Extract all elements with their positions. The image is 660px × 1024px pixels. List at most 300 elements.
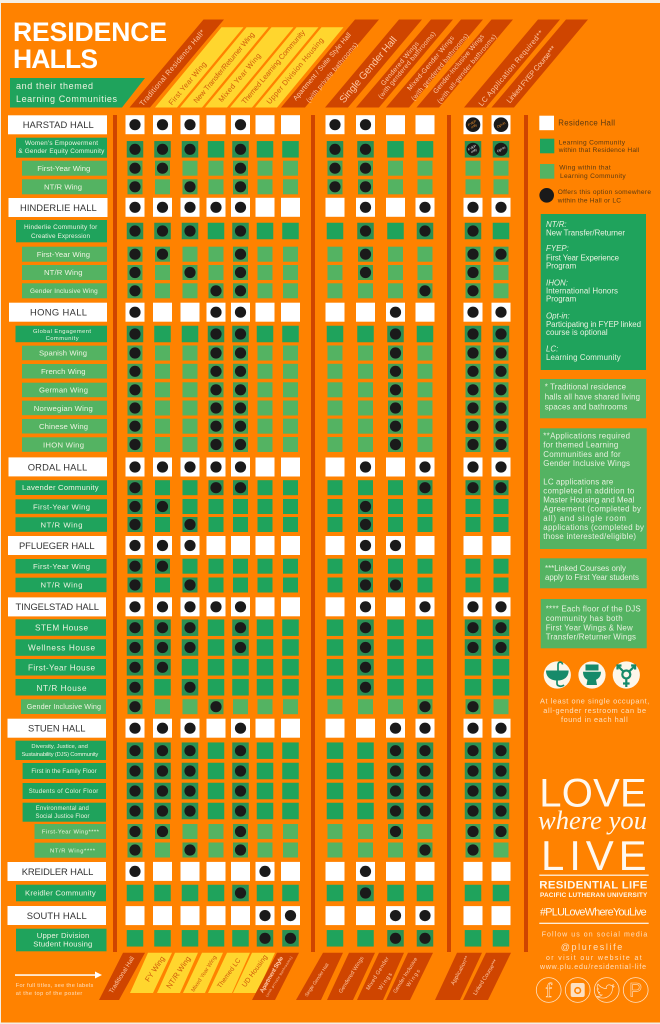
note: linked courses: apply to First Year students: [545, 573, 639, 582]
hall label: [8, 719, 106, 738]
floor label: Social Justice Floor: [36, 814, 90, 820]
footer band: Mixed Gender Wings: Wings: [378, 972, 394, 992]
wing label: NT/R Wing: [44, 268, 82, 277]
community label: [16, 326, 107, 342]
hall label: HONG HALL: [30, 306, 87, 318]
row: Harstad Hall: [8, 115, 510, 134]
header band: Gendered Wings: (with gendered bathrooms): [377, 31, 437, 100]
house label: STEM House: [35, 624, 88, 633]
option cells: [128, 364, 508, 379]
header band: New Transfer/Returner Wing: [180, 27, 268, 107]
legend: learning community: within that Residence Hall: [558, 147, 640, 154]
legend: wing: Wing within that: [559, 165, 611, 172]
wing label: [22, 383, 107, 397]
header band: Mixed Year Wing: Mixed Year Wing: [217, 51, 263, 104]
icon: facebook: f: [545, 980, 552, 1002]
header band: Apartment / Suite Style Hall: Apartment / Suite Style Hall: [292, 32, 353, 102]
footer band: Themed LC: Themed LC: [216, 957, 243, 990]
note: DJS community: community has both: [546, 614, 623, 623]
note: DJS community: **** Each floor of the DJS: [546, 605, 641, 614]
hall label: [8, 536, 106, 555]
definitions panel: LC:: [546, 345, 558, 354]
footer band: UD Housing: UD Housing: [241, 954, 269, 989]
wing label: [22, 265, 107, 280]
option cells: [128, 247, 508, 262]
note: applications: completed in addition to: [543, 486, 635, 495]
row: NT/R House: [16, 679, 509, 696]
definitions panel: NT/R:: [546, 220, 567, 229]
hall label: TINGELSTAD HALL: [16, 601, 99, 612]
hall label: HARSTAD HALL: [23, 119, 94, 130]
note: applications: applications (completed by: [543, 523, 644, 532]
footer band: Apartment Style: Apartment Style: [259, 955, 285, 994]
row: First-Year House: [16, 659, 509, 676]
header band: Traditional Residence Hall: [130, 20, 224, 108]
hall label: [8, 597, 106, 616]
wing label: [16, 578, 106, 592]
wing label: First-Year Wing: [37, 250, 90, 259]
definitions panel: course is optional: [546, 328, 608, 337]
header band: Gendered Wings: [356, 20, 453, 108]
legend: dot: [539, 188, 651, 205]
footer band: Apartment Style: [252, 953, 299, 1000]
wing label: [22, 283, 107, 298]
row: Pflueger First-Year Wing: [16, 559, 508, 574]
option cells: [128, 346, 508, 360]
note: DJS community: First Year Wings & New: [546, 623, 633, 632]
icon: sink: [544, 661, 571, 689]
header band: Apartment / Suite Style Hall: [281, 20, 379, 108]
header band: Themed Learning Community: Themed Learning Community: [240, 28, 307, 106]
logo: Love Where You Live: RESIDENTIAL LIFE: [539, 880, 648, 892]
wing label: NT/R Wing: [40, 520, 82, 529]
FYEP only and opt-in badges: Women's community: FYEP: [467, 144, 477, 152]
row: Hinderlie Community for Creative Expression: [16, 220, 509, 242]
footer band: Single Gender Hall: [296, 953, 343, 1000]
row: First in the Family Floor: [23, 763, 509, 779]
header band: LC Application Required: LC Application Required**: [477, 28, 545, 108]
community label: [16, 138, 107, 158]
logo: Love Where You Live: [538, 772, 649, 924]
row: Tingelstad Hall: [8, 597, 510, 616]
subtitle banner: [10, 78, 145, 108]
wing label: First-Year Wing: [33, 502, 90, 511]
community label: [16, 741, 106, 760]
house label: Wellness House: [28, 644, 95, 652]
footer band: Gender Inclusive Wings: Gender Inclusive: [392, 957, 419, 995]
community label: Upper Division: [37, 931, 89, 940]
note: applications: all) and single room: [543, 514, 626, 523]
hall label: HINDERLIE HALL: [20, 202, 97, 213]
wing label: Chinese Wing: [39, 422, 88, 431]
restroom note: At least one single occupant,: [540, 696, 649, 706]
header band: New Transfer/Returner Wing: New Transfer/Returner Wing: [192, 30, 256, 105]
column separators: [113, 115, 528, 952]
footer band: Mixed Gender Wings: [357, 953, 404, 1000]
social media text: or visit our website at: [546, 955, 642, 962]
note: traditional halls: * Traditional residence: [545, 383, 627, 392]
option cells: [127, 141, 509, 158]
note: applications: Communities and for: [543, 450, 621, 459]
row: Hinderlie Hall: [8, 198, 510, 217]
header band: Linked FYEP Course: [492, 20, 588, 108]
floor label: Environmental and: [36, 806, 89, 812]
option cells: [128, 578, 508, 592]
header band: Linked FYEP Course: Linked FYEP Course***: [505, 44, 558, 105]
definitions panel: IHON:: [546, 278, 568, 287]
title: HALLS: [13, 44, 98, 74]
hall label: [8, 862, 106, 881]
wing label: Gender Inclusive Wing: [30, 288, 98, 295]
title: [13, 17, 167, 74]
header band: Gender-Inclusive Wings: [416, 20, 513, 108]
option cells: [128, 517, 508, 532]
wing label: NT/R Wing: [44, 182, 82, 192]
restroom note: [540, 696, 649, 724]
option cells: [126, 536, 510, 555]
legend: learning community: Learning Community: [559, 139, 626, 146]
wing label: First-Year Wing: [37, 164, 90, 173]
row: Lavender Community: [16, 480, 508, 495]
logo: Love Where You Live: LIVE: [541, 832, 647, 879]
note: full titles: at the top of the poster: [16, 991, 82, 997]
row: Pflueger NT/R Wing: [16, 578, 508, 592]
definitions panel: Participating in FYEP linked: [546, 320, 641, 329]
wing label: [16, 559, 106, 574]
wing label: NT/R Wing****: [50, 848, 96, 854]
house label: First-Year House: [28, 664, 95, 673]
wing label: [22, 419, 107, 434]
option cells: [128, 559, 508, 574]
hall label: [9, 303, 107, 322]
floor label: [23, 763, 106, 779]
footer band: Mixed Gender Wings: Mixed Gender: [365, 956, 391, 992]
FYEP only and opt-in badges: Women's community: only: [470, 147, 478, 154]
hall label: [8, 198, 108, 217]
option cells: [127, 763, 509, 779]
footer band: Linked Course: [463, 953, 511, 1000]
legend: learning community: [540, 139, 640, 154]
wing label: German Wing: [39, 386, 88, 395]
note: applications: for themed Learning: [543, 441, 618, 450]
FYEP only and opt-in badges: Harstad: only: [470, 123, 478, 129]
icon: pinterest: [623, 978, 648, 1002]
row: German Wing: [22, 382, 508, 397]
footer band: Single Gender Hall: Single Gender Hall: [304, 962, 331, 998]
row: Kreidler Community: [16, 885, 509, 901]
community label: & Gender Equity Community: [18, 148, 105, 155]
subtitle banner: and their themed: [16, 81, 93, 91]
wing label: NT/R Wing: [40, 581, 82, 590]
row: Hinderlie NT/R Wing: [22, 265, 508, 280]
header band: Upper Division Housing: Upper Division Housing: [265, 36, 325, 106]
house label: [16, 619, 106, 636]
option cells: [127, 223, 509, 239]
house label: [16, 659, 106, 676]
definitions panel: Learning Community: [546, 353, 621, 362]
header band: Mixed Year Wing: [205, 27, 294, 107]
logo: Love Where You Live: LOVE: [539, 772, 647, 816]
social media text: www.plu.edu/residential-life: [539, 964, 646, 971]
option cells: [128, 499, 508, 514]
community label: Diversity, Justice, and: [31, 744, 88, 750]
community label: Hinderlie Community for: [24, 224, 98, 231]
row: Chinese Wing: [22, 419, 508, 434]
icon: instagram: [565, 978, 590, 1002]
floor label: Students of Color Floor: [29, 789, 98, 795]
community label: Student Housing: [33, 940, 92, 949]
FYEP only and opt-in badges: Harstad: Opt-in: [496, 121, 506, 129]
header band: Mixed-Gender Wings: Mixed-Gender Wings: [406, 34, 456, 92]
option cells: [128, 179, 508, 194]
wing label: [22, 247, 107, 262]
logo: Love Where You Live: PACIFIC LUTHERAN UNIVERSITY: [540, 892, 648, 899]
footer band: Mixed Year Wing: [183, 953, 223, 993]
legend: wing: Learning Community: [560, 173, 626, 180]
community label: [16, 885, 106, 901]
header band: First Year Wing: First Year Wing: [167, 60, 208, 107]
row: Spanish Wing: [22, 346, 508, 360]
option cells: [128, 699, 508, 714]
option cells: [127, 783, 509, 799]
option cells: [127, 619, 509, 636]
option cells: [127, 679, 509, 696]
hall label: [8, 457, 107, 476]
note: applications: those interested/eligible): [543, 532, 636, 541]
row: Stuen NT/R Wing: [34, 842, 508, 858]
wing label: [34, 824, 106, 839]
option cells: [126, 458, 510, 476]
definitions panel: First Year Experience: [546, 253, 620, 262]
footer band: Application: Application**: [450, 955, 471, 986]
row: Environmental and Social Justice Floor: [23, 803, 509, 822]
FYEP only and opt-in badges: Women's community: [466, 143, 508, 156]
option cells: [128, 419, 508, 434]
option cells: [128, 842, 508, 858]
row: South Hall: [8, 906, 510, 925]
legend: dot: within the Hall or LC: [557, 198, 621, 205]
footer band: NT/R Wing: NT/R Wing: [164, 955, 192, 990]
option cells: [127, 885, 509, 901]
wing label: [21, 699, 106, 714]
row: Ordal First-Year Wing: [16, 499, 508, 514]
community label: Lavender Community: [22, 483, 99, 492]
row: Ordal Hall: [8, 457, 510, 476]
option cells: [128, 382, 508, 397]
header band: First Year Wing: [155, 27, 244, 107]
row: Tingelstad Gender Inclusive Wing: [21, 699, 508, 714]
legend: dot: Offers this option somewhere: [558, 189, 651, 196]
footer band: NT/R Wing: [157, 953, 198, 993]
option cells: [126, 115, 510, 134]
row: Kreidler Hall: [8, 862, 510, 881]
option cells: [127, 803, 509, 819]
hall label: SOUTH HALL: [27, 910, 87, 921]
logo: Love Where You Live: #PLULoveWhereYouLive: [540, 906, 647, 918]
wing label: [16, 499, 107, 514]
row: Global Engagement Community: [16, 326, 509, 342]
floor label: [23, 803, 106, 822]
wing label: Norwegian Wing: [34, 404, 93, 413]
hall label: ORDAL HALL: [28, 462, 87, 472]
community label: Global Engagement: [33, 329, 91, 335]
floor label: First in the Family Floor: [31, 769, 97, 775]
wing label: [22, 401, 107, 415]
definitions panel: [541, 214, 646, 370]
title: RESIDENCE: [13, 17, 167, 47]
note: applications: LC applications are: [543, 477, 614, 486]
option cells: [128, 283, 508, 298]
note: linked courses: ***Linked Courses only: [545, 564, 626, 573]
house label: NT/R House: [36, 684, 87, 693]
definitions panel: Program: [546, 295, 577, 304]
note: applications: Agreement (completed by: [543, 505, 641, 514]
option cells: [128, 824, 508, 839]
row: Hinderlie First-Year Wing: [22, 247, 508, 262]
footer band: FY Wing: FY Wing: [143, 954, 167, 984]
icon: facebook: [536, 978, 561, 1002]
header band: Single Gender Hall: Single Gender Hall: [338, 35, 400, 106]
community label: Women's Empowerment: [25, 140, 98, 147]
FYEP only and opt-in badges: Harstad: [466, 117, 508, 132]
header band: Single Gender Hall: [325, 20, 422, 108]
restroom note: all-gender restroom can be: [543, 706, 646, 715]
option cells: [128, 265, 508, 280]
row: French Wing: [22, 364, 508, 379]
footer band: Themed LC: [208, 953, 250, 993]
wing label: Spanish Wing: [39, 349, 87, 358]
footer band: Apartment Style: (with private bathrooms): [265, 956, 293, 998]
note: DJS community: [541, 599, 647, 648]
footer band: Traditional Hall: Traditional Hall: [108, 956, 136, 995]
row: IHON Wing: [22, 437, 508, 452]
logo: Love Where You Live: where you: [538, 806, 647, 835]
community label: [16, 480, 107, 495]
wing label: [22, 437, 107, 452]
option cells: [126, 906, 510, 925]
hall label: PFLUEGER HALL: [19, 540, 95, 551]
option cells: [128, 437, 508, 452]
social media text: @plureslife: [561, 942, 622, 952]
option cells: [128, 400, 508, 416]
legend: residence hall: [539, 116, 615, 130]
footer band: Application: [435, 953, 482, 1000]
option cells: [126, 597, 510, 616]
row: Diversity, Justice, and Sustainability (DJS) Community: [16, 741, 509, 760]
note: full titles: [16, 983, 94, 997]
wing label: [22, 179, 107, 194]
footer band: Gendered Wings: Gendered Wings: [338, 956, 366, 995]
note: traditional halls: spaces and bathrooms: [545, 402, 627, 411]
wing label: [22, 364, 107, 378]
header band: Mixed-Gender Wings: (with gendered bathrooms): [410, 33, 470, 102]
icon: toilet: [578, 661, 606, 689]
footer band: Linked Course: Linked Course***: [472, 958, 500, 997]
footer band: Gendered Wings: [327, 953, 375, 1000]
wing label: First-Year Wing****: [42, 830, 100, 836]
subtitle banner: Learning Communities: [16, 94, 118, 104]
community label: Kreidler Community: [25, 888, 96, 898]
definitions panel: Opt-in:: [546, 312, 570, 321]
option cells: [127, 742, 509, 759]
row: Ordal NT/R Wing: [16, 517, 508, 532]
option cells: [126, 303, 510, 322]
social media text: Follow us on social media: [542, 932, 647, 939]
wing label: [22, 161, 107, 176]
footer band: UD Housing: [233, 953, 275, 993]
row: Hinderlie Gender Inclusive Wing: [22, 283, 508, 298]
header band: Traditional Residence Hall: Traditional Residence Hall*: [138, 28, 207, 108]
option cells: [126, 198, 510, 217]
row: Women's Empowerment and Gender Equity Community: [16, 138, 509, 158]
icon: twitter: [594, 978, 619, 1002]
option cells: [127, 639, 509, 656]
header band: Gender-Inclusive Wings: (with all-gender bathrooms): [436, 33, 498, 105]
wing label: First-Year Wing: [33, 562, 90, 571]
wing label: French Wing: [41, 367, 86, 376]
definitions panel: International Honors: [546, 286, 618, 295]
note: applications: Master Housing and Meal: [543, 495, 635, 504]
hall label: [8, 906, 106, 925]
header band: Gendered Wings: Gendered Wings: [380, 40, 421, 87]
FYEP only and opt-in badges: Harstad: FYEP: [467, 119, 477, 127]
house label: [16, 639, 106, 656]
header band: Mixed-Gender Wings: [386, 20, 483, 108]
hall label: [8, 115, 107, 134]
floor label: [23, 783, 106, 799]
row: Hong Hall: [9, 303, 510, 322]
option cells: [128, 480, 508, 495]
note: traditional halls: halls all have shared living: [545, 392, 640, 401]
community label: [16, 220, 107, 242]
legend: wing: [540, 164, 626, 180]
row: Students of Color Floor: [23, 783, 509, 799]
arrow to bottom labels: [15, 972, 102, 978]
header band: Upper Division Housing: [255, 27, 344, 107]
wing label: [22, 346, 107, 360]
footer band: Gender Inclusive Wings: Wings: [406, 968, 422, 988]
social media text: [539, 932, 647, 971]
option cells: [126, 862, 510, 881]
community label: [16, 929, 106, 951]
row: Harstad NT/R Wing: [22, 179, 508, 194]
option cells: [126, 719, 510, 738]
note: DJS community: Transfer/Returner Wings: [546, 633, 636, 642]
restroom note: found in each hall: [561, 715, 628, 724]
definitions panel: Program: [546, 262, 577, 271]
wing label: Gender Inclusive Wing: [27, 702, 101, 711]
community label: Sustainability (DJS) Community: [22, 752, 98, 758]
note: applications: **Applications required: [543, 431, 630, 440]
header band: Apartment / Suite Style Hall: (with private bathrooms): [305, 42, 360, 104]
wing label: IHON Wing: [43, 440, 84, 449]
footer band: Traditional Hall: [99, 953, 145, 1000]
note: applications: [540, 428, 647, 549]
community label: Creative Expression: [31, 233, 90, 240]
definitions panel: New Transfer/Returner: [546, 228, 625, 237]
option cells: [128, 161, 508, 176]
option cells: [127, 659, 509, 676]
option cells: [127, 326, 509, 342]
row: Stuen Hall: [8, 719, 510, 738]
icon: pinterest: P: [629, 980, 642, 1002]
note: applications: Gender Inclusive Wings: [543, 459, 630, 468]
note: linked courses: [540, 558, 647, 588]
legend: residence hall: Residence Hall: [558, 118, 615, 128]
row: Norwegian Wing: [22, 400, 508, 416]
note: traditional halls: [540, 379, 646, 418]
header band: LC Application Required: [464, 20, 560, 108]
